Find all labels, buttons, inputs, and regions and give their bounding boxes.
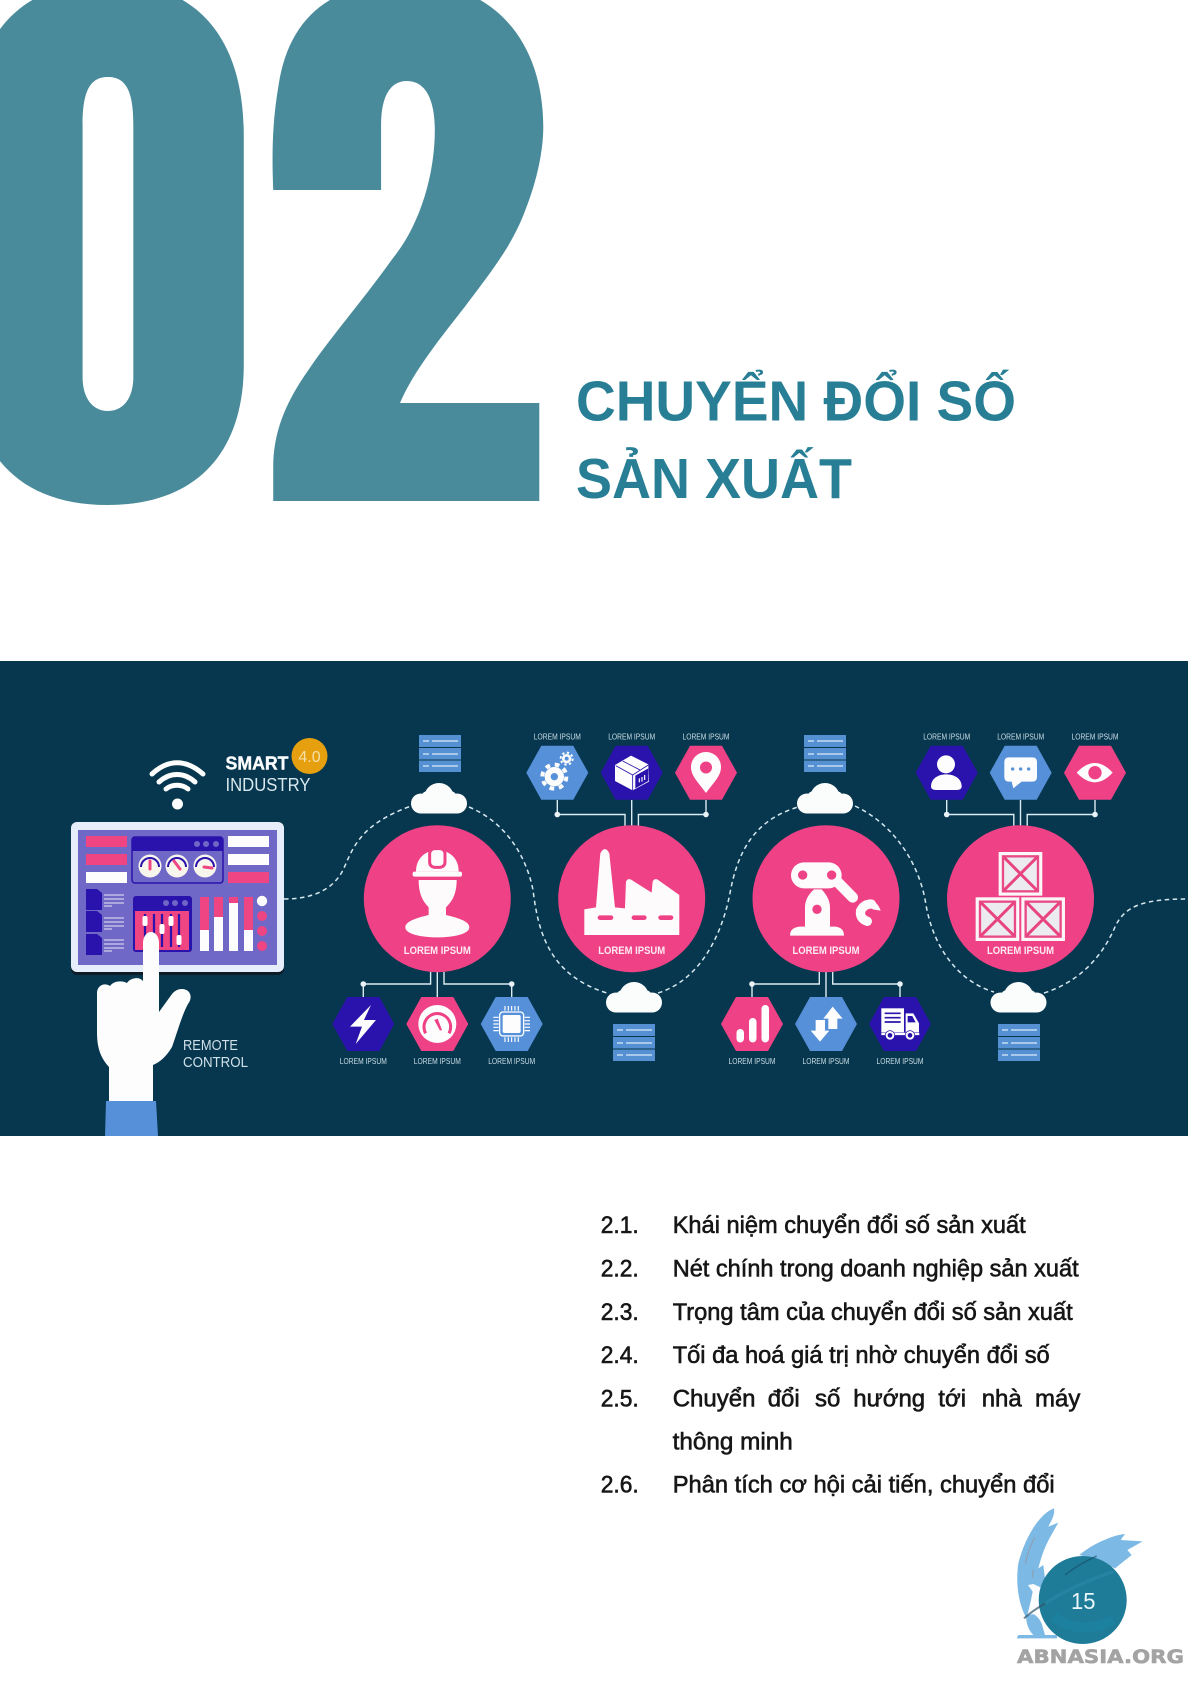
clouds and server stacks bbox=[411, 735, 1046, 1061]
hexagon: gears: LOREM IPSUM bbox=[534, 732, 581, 742]
wifi icon bbox=[152, 763, 203, 810]
table of contents list: hướng bbox=[853, 1386, 925, 1412]
table of contents list: nhà bbox=[982, 1386, 1022, 1412]
panel: smart industry illustration bbox=[0, 661, 1188, 1136]
hexagon: truck bbox=[869, 997, 931, 1066]
table of contents list: Phân tích cơ hội cải tiến, chuyển đổi bbox=[673, 1472, 1055, 1499]
table of contents list: 2.6. bbox=[601, 1472, 639, 1499]
slider window bbox=[133, 896, 192, 952]
gauge window bbox=[132, 837, 223, 883]
hexagon: gears bbox=[526, 732, 588, 800]
hexagon: person: LOREM IPSUM bbox=[923, 732, 970, 742]
table of contents list: máy bbox=[1035, 1386, 1080, 1412]
table of contents list: 2.2. bbox=[601, 1256, 639, 1283]
hexagon: lightning: LOREM IPSUM bbox=[340, 1057, 387, 1066]
title: CHUYỂN ĐỔI SỐ bbox=[576, 368, 1016, 434]
table of contents list: Nét chính trong doanh nghiệp sản xuất bbox=[673, 1256, 1079, 1283]
bar meters bbox=[200, 896, 267, 951]
hexagon: eye bbox=[1064, 732, 1126, 800]
logo: winged mascot with page number bbox=[1017, 1508, 1184, 1668]
hexagon: chip: LOREM IPSUM bbox=[488, 1057, 535, 1066]
hexagon: chat bubble bbox=[990, 732, 1052, 800]
table of contents list: tới bbox=[938, 1386, 966, 1412]
hexagon: package: LOREM IPSUM bbox=[608, 732, 655, 742]
table of contents list: Tối đa hoá giá trị nhờ chuyển đổi số bbox=[673, 1342, 1050, 1369]
hexagon: chip bbox=[481, 997, 543, 1066]
circle: robot arm: LOREM IPSUM bbox=[792, 945, 860, 957]
hexagon: lightning bbox=[332, 997, 394, 1066]
connectors bbox=[363, 800, 1095, 997]
table of contents list: 2.4. bbox=[601, 1342, 639, 1369]
table of contents list: Khái niệm chuyển đổi số sản xuất bbox=[673, 1212, 1026, 1239]
hand pointing bbox=[97, 932, 191, 1136]
hexagon: bar chart: LOREM IPSUM bbox=[728, 1057, 776, 1066]
hexagon: arrows: LOREM IPSUM bbox=[802, 1057, 850, 1066]
hexagon: bar chart bbox=[721, 997, 783, 1066]
smart industry 4.0 label: SMART bbox=[226, 754, 288, 774]
circle: worker: LOREM IPSUM bbox=[404, 945, 471, 957]
hexagon: package bbox=[601, 732, 663, 800]
smart industry 4.0 label bbox=[226, 738, 328, 795]
logo: winged mascot with page number: 15 bbox=[1071, 1588, 1096, 1614]
hexagon: chat bubble: LOREM IPSUM bbox=[997, 732, 1044, 742]
smart industry 4.0 label: INDUSTRY bbox=[226, 774, 310, 795]
table of contents list: thông minh bbox=[673, 1428, 793, 1456]
circle: crates bbox=[947, 825, 1094, 972]
hexagon: eye: LOREM IPSUM bbox=[1072, 732, 1119, 742]
logo: winged mascot with page number: ABNASIA.ORG bbox=[1017, 1646, 1184, 1668]
hexagon: arrows bbox=[795, 997, 857, 1066]
hexagon: truck: LOREM IPSUM bbox=[876, 1057, 924, 1066]
circle: factory bbox=[558, 825, 705, 972]
smart industry 4.0 label: 4.0 bbox=[298, 749, 321, 766]
hexagon: person bbox=[916, 732, 978, 800]
circle: crates: LOREM IPSUM bbox=[987, 945, 1054, 957]
circle: robot arm bbox=[752, 825, 900, 972]
hexagon: gauge bbox=[406, 997, 468, 1066]
remote control label: CONTROL bbox=[183, 1054, 248, 1071]
tabs with text lines bbox=[86, 889, 124, 955]
table of contents list: 2.3. bbox=[601, 1299, 639, 1326]
circle: worker bbox=[364, 825, 511, 972]
hexagon: gauge: LOREM IPSUM bbox=[414, 1057, 461, 1066]
title: SẢN XUẤT bbox=[576, 446, 852, 511]
remote control label bbox=[183, 1037, 248, 1071]
table of contents list: Trọng tâm của chuyển đổi số sản xuất bbox=[673, 1299, 1073, 1326]
big number 02 bbox=[0, 0, 543, 505]
circle: factory: LOREM IPSUM bbox=[598, 945, 665, 957]
hexagon: map pin: LOREM IPSUM bbox=[682, 732, 730, 742]
title bbox=[576, 368, 1016, 511]
dashed network curves bbox=[284, 806, 1188, 993]
table of contents list bbox=[601, 1212, 1080, 1499]
table of contents list: số bbox=[815, 1386, 840, 1412]
hexagon: map pin bbox=[675, 732, 737, 800]
table of contents list: Chuyển bbox=[673, 1386, 755, 1412]
table of contents list: 2.5. bbox=[601, 1386, 639, 1412]
tablet dashboard bbox=[71, 822, 284, 975]
table of contents list: đổi bbox=[768, 1386, 800, 1412]
remote control label: REMOTE bbox=[183, 1037, 238, 1054]
table of contents list: 2.1. bbox=[601, 1212, 639, 1239]
